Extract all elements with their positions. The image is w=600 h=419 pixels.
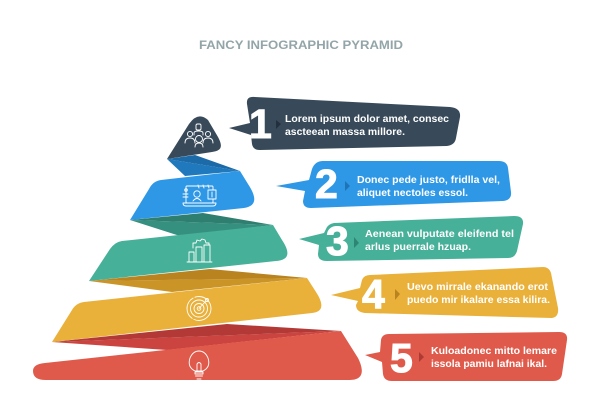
- text 1: ascteean massa millore.: [285, 127, 405, 138]
- icon: people group: [185, 124, 213, 147]
- text 3: [365, 229, 514, 253]
- icon: website laptop: [183, 185, 216, 206]
- number 4: 4: [362, 271, 385, 317]
- number 1: 1: [249, 101, 272, 147]
- number 3: 3: [326, 218, 349, 264]
- layer 5: red: [33, 324, 362, 380]
- icon: radar target: [187, 296, 211, 320]
- icon: light bulb: [189, 351, 209, 379]
- text 3: Aenean vulputate eleifend tel: [365, 229, 514, 240]
- text 5: Kuloadonec mitto lemare: [431, 346, 557, 357]
- layer 3: green: [89, 213, 287, 281]
- layer 2: blue: [130, 155, 254, 220]
- layer 1: dark slate: [167, 116, 221, 159]
- text 5: issola pamiu lafnai ikal.: [431, 359, 547, 370]
- callout 5: [365, 332, 567, 381]
- pyramid: [33, 116, 362, 380]
- layer 4: gold: [52, 269, 321, 342]
- text 2: aliquet nectoles essol.: [357, 188, 468, 199]
- text 2: Donec pede justo, fridlla vel,: [357, 175, 500, 186]
- number 2: 2: [315, 161, 338, 207]
- callout 1: [229, 97, 460, 150]
- text 1: [285, 114, 449, 138]
- title: FANCY INFOGRAPHIC PYRAMID: [199, 38, 403, 52]
- number 5: 5: [390, 335, 413, 381]
- callout 3: [299, 216, 523, 264]
- text 4: puedo mir ikalare essa kilira.: [407, 295, 550, 306]
- callout 4: [331, 267, 558, 318]
- text 4: Uevo mirrale ekanando erot: [407, 282, 549, 293]
- text 2: [357, 175, 500, 199]
- text 4: [407, 282, 550, 306]
- icon: factory chart: [187, 239, 212, 262]
- text 1: Lorem ipsum dolor amet, consec: [285, 114, 449, 125]
- text 3: arlus puerrale hzuap.: [365, 242, 471, 253]
- text 5: [431, 346, 557, 370]
- callout 2: [276, 161, 511, 208]
